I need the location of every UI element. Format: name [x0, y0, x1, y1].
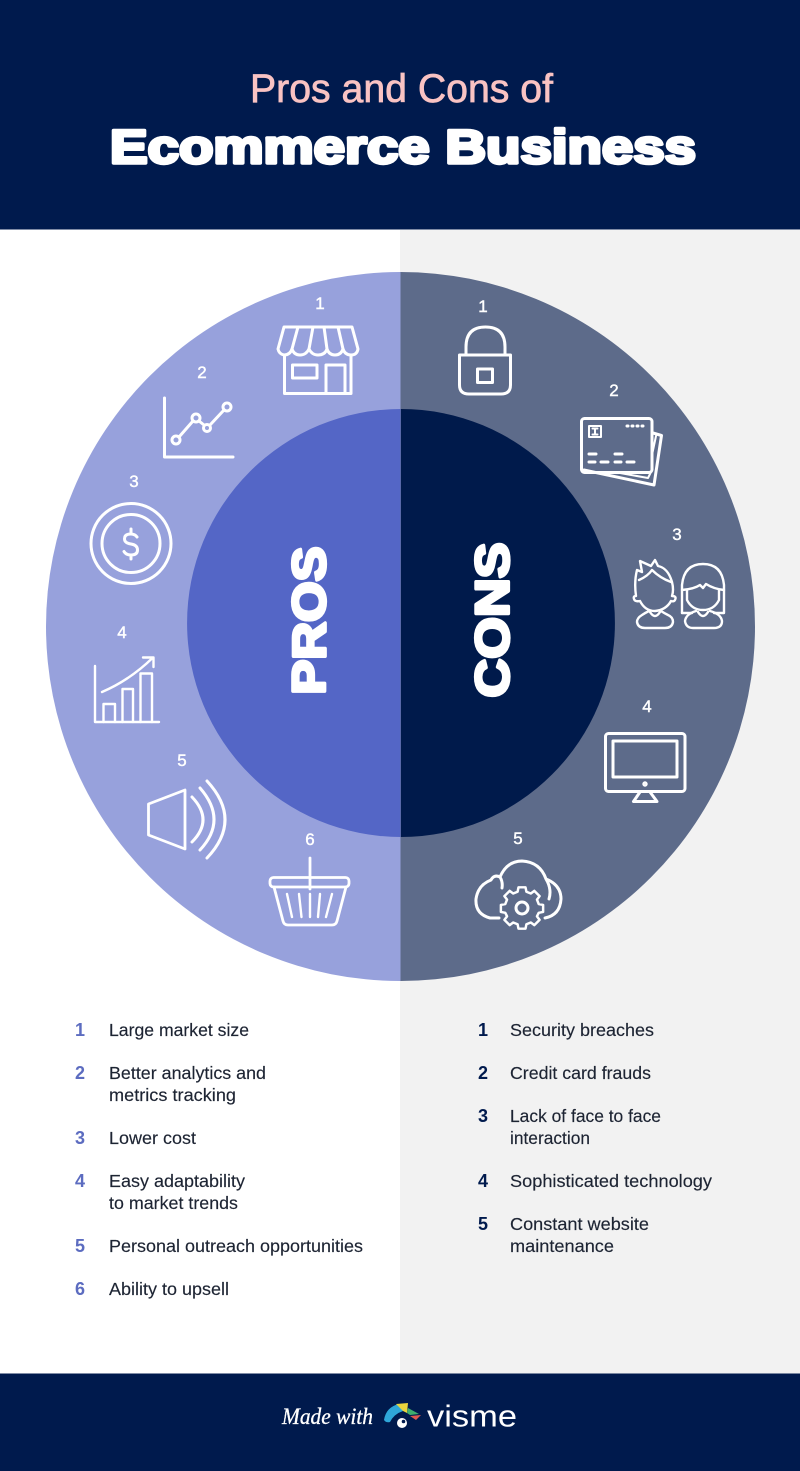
list: pros: Ability to upsell [109, 1279, 229, 1299]
title line two: Ecommerce Business [110, 120, 696, 173]
footer band with made-with credit [0, 1374, 800, 1471]
list: cons: Security breaches [510, 1020, 654, 1040]
cons 2: credit cards icon: 2 [609, 381, 619, 400]
pros 1: store icon: 1 [315, 294, 325, 313]
circle: cons half [400, 272, 755, 981]
list: pros: Large market size [109, 1020, 249, 1040]
header band [0, 0, 800, 230]
list: cons: Lack of face to face [510, 1106, 661, 1126]
list: cons: maintenance [510, 1236, 614, 1256]
cons 5: cloud with gear icon: 5 [513, 829, 523, 848]
pros 6: basket icon [270, 830, 349, 925]
list: pros: 1 [75, 1020, 85, 1040]
pros 3: coin icon [91, 472, 171, 584]
footer band with made-with credit: visme [427, 1398, 517, 1434]
circle: pros half [46, 272, 401, 981]
cons 5: cloud with gear icon [476, 829, 561, 929]
pros 5: speaker icon: 5 [177, 751, 187, 770]
pros 3: coin icon: 3 [129, 472, 139, 491]
cons 4: desktop monitor icon: 4 [642, 697, 652, 716]
cons 3: two people icon: 3 [672, 525, 682, 544]
pros 2: line chart icon [164, 363, 233, 457]
pros 1: store icon [278, 294, 358, 394]
list: cons: 3 [478, 1106, 488, 1126]
cons 2: credit cards icon [582, 381, 662, 485]
list: pros: 5 [75, 1236, 85, 1256]
pros 4: growth bars icon [95, 623, 159, 722]
pros 2: line chart icon: 2 [197, 363, 207, 382]
title line one: Pros and Cons of [250, 67, 554, 111]
cons 1: padlock icon: 1 [478, 297, 488, 316]
list: cons: interaction [510, 1128, 590, 1148]
footer band with made-with credit: Made with [281, 1404, 373, 1429]
cons 4: desktop monitor icon [606, 697, 685, 802]
pros 4: growth bars icon: 4 [117, 623, 127, 642]
list: pros: Personal outreach opportunities [109, 1236, 363, 1256]
list: cons: Sophisticated technology [510, 1171, 712, 1191]
list: cons: Constant website [510, 1214, 649, 1234]
label: CONS: CONS [466, 542, 518, 698]
list: pros: metrics tracking [109, 1085, 236, 1105]
pros 5: speaker icon [148, 751, 225, 858]
list: pros: Better analytics and [109, 1063, 266, 1083]
list: cons: Credit card frauds [510, 1063, 651, 1083]
list: pros: 3 [75, 1128, 85, 1148]
list: pros: 2 [75, 1063, 85, 1083]
icon: visme logo [384, 1403, 421, 1428]
pros 6: basket icon: 6 [305, 830, 315, 849]
list: cons: 1 [478, 1020, 488, 1040]
cons 1: padlock icon [460, 297, 510, 394]
cons 3: two people icon [634, 525, 724, 628]
list: cons: 4 [478, 1171, 488, 1191]
list: cons: 5 [478, 1214, 488, 1234]
list: pros: to market trends [109, 1193, 238, 1213]
list: cons: 2 [478, 1063, 488, 1083]
list: pros: 4 [75, 1171, 85, 1191]
list: pros [75, 1020, 363, 1299]
label: PROS: PROS [283, 546, 335, 694]
list: cons [478, 1020, 712, 1256]
list: pros: Lower cost [109, 1128, 196, 1148]
list: pros: 6 [75, 1279, 85, 1299]
list: pros: Easy adaptability [109, 1171, 245, 1191]
